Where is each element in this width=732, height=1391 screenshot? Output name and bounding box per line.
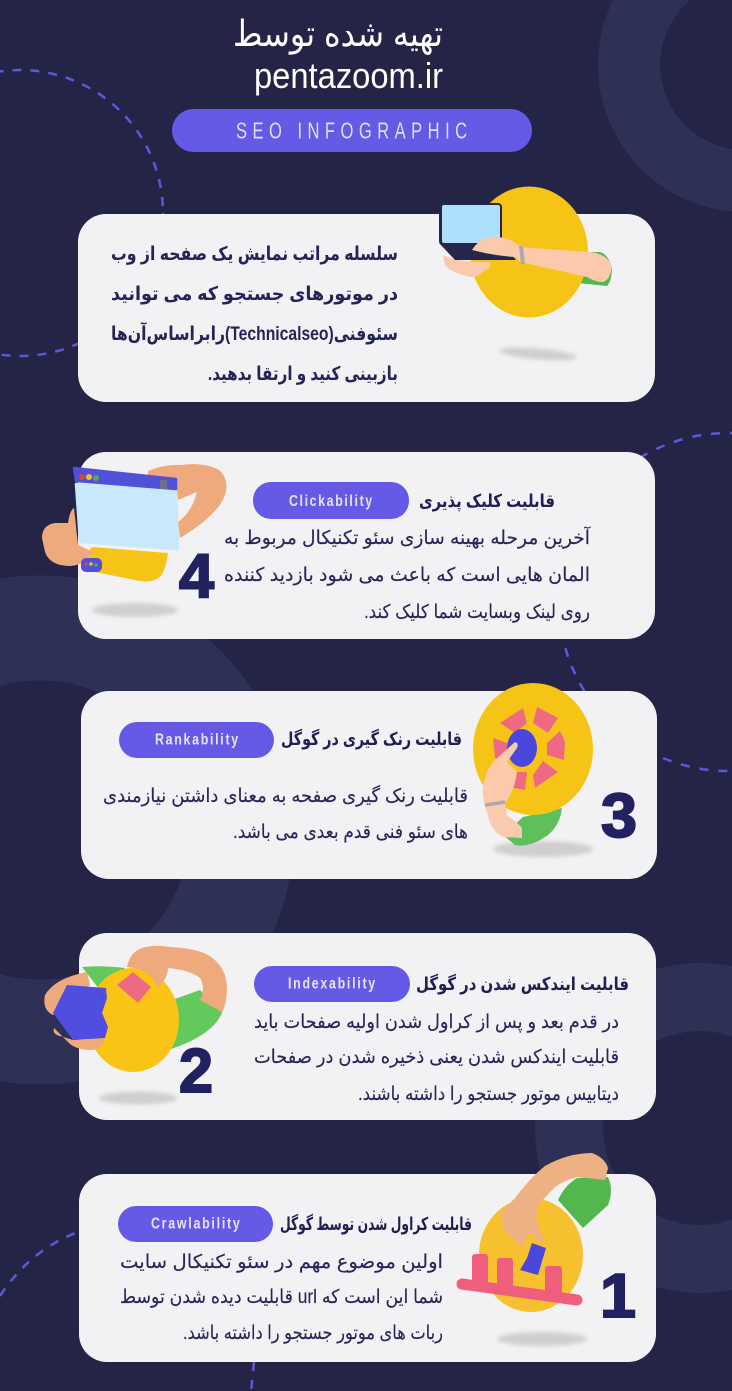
pill: Rankability: Rankability xyxy=(155,730,238,748)
number 4: 4 xyxy=(179,542,215,611)
background ring: left xyxy=(0,628,242,1032)
body: step 3 xyxy=(103,784,468,843)
intro text: بازبینی کنید و ارتقا بدهید. xyxy=(208,364,398,385)
intro text: سئوفنی(Technicalseo)رابراساس‌آن‌ها xyxy=(111,321,398,345)
number 3: 3 xyxy=(601,782,637,851)
dashed arc: top left xyxy=(0,70,163,356)
heading: step 3: قابلیت رنک گیری در گوگل xyxy=(281,728,462,750)
body: step 2: دیتابیس موتور جستجو را داشته باشند. xyxy=(358,1084,619,1105)
title: pentazoom.ir xyxy=(254,55,443,96)
background ring: top right xyxy=(629,0,732,181)
icon: hand on laptop xyxy=(439,186,612,363)
body: step 4: المان هایی است که باعث می شود بازدید کننده xyxy=(224,565,590,586)
icon: hands holding browser window xyxy=(42,464,227,617)
body: step 2: قابلیت ایندکس شدن یعنی ذخیره شدن در صفحات xyxy=(254,1047,619,1068)
title: تهیه شده توسط xyxy=(233,13,443,55)
heading: step 1: قابلیت کراول شدن توسط گوگل xyxy=(280,1213,472,1235)
body: step 1: اولین موضوع مهم در سئو تکنیکال سایت xyxy=(120,1252,443,1273)
dashed arc: bottom left xyxy=(0,1232,254,1391)
pill: Indexability xyxy=(254,966,410,1002)
pill: Clickability: Clickability xyxy=(289,492,372,509)
body: step 4: روی لینک وبسایت شما کلیک کند. xyxy=(364,602,590,623)
body: step 4 xyxy=(224,525,591,623)
body: step 4: آخرین مرحله بهینه سازی سئو تکنیکال مربوط به xyxy=(224,525,591,549)
panel: step 4 clickability xyxy=(42,452,655,639)
icon: hand placing block on pegs xyxy=(462,1153,611,1346)
panel: step 1 crawlability xyxy=(79,1153,656,1362)
body: step 1 xyxy=(120,1252,443,1344)
heading: step 2: قابلیت ایندکس شدن در گوگل xyxy=(416,973,629,995)
pill: Crawlability xyxy=(118,1206,273,1242)
panel: step 3 rankability xyxy=(81,683,657,879)
banner: SEO infographic: SEO INFOGRAPHIC xyxy=(236,119,467,144)
body: step 3: های سئو فنی قدم بعدی می باشد. xyxy=(233,822,468,843)
background ring: bottom right xyxy=(569,997,732,1259)
pill: Indexability: Indexability xyxy=(288,974,375,992)
pill: Rankability xyxy=(119,722,274,758)
pill: Crawlability: Crawlability xyxy=(151,1214,240,1232)
title xyxy=(233,13,443,96)
number 2: 2 xyxy=(179,1037,213,1106)
icon: hands placing cubes xyxy=(44,946,227,1104)
pill: Clickability xyxy=(253,482,409,519)
body: step 1: ربات های موتور جستجو را داشته باشد. xyxy=(183,1323,443,1344)
body: step 2 xyxy=(254,1012,619,1105)
heading: step 4: قابلیت کلیک پذیری xyxy=(419,491,555,512)
intro text: در موتورهای جستجو که می توانید xyxy=(111,284,398,305)
intro text xyxy=(111,244,398,385)
body: step 1: شما این است که url قابلیت دیده شدن توسط xyxy=(120,1287,443,1308)
number 1: 1 xyxy=(600,1262,636,1331)
banner: SEO infographic xyxy=(172,109,532,152)
icon: finger pressing dial xyxy=(473,683,593,857)
dashed arc: right xyxy=(559,433,732,771)
panel: intro xyxy=(78,186,655,402)
panel: step 2 indexability xyxy=(44,933,656,1120)
intro text: سلسله مراتب نمایش یک صفحه از وب xyxy=(111,244,398,265)
body: step 3: قابلیت رنک گیری صفحه به معنای داشتن نیازمندی xyxy=(103,784,468,807)
body: step 2: در قدم بعد و پس از کراول شدن اولیه صفحات باید xyxy=(254,1012,619,1033)
